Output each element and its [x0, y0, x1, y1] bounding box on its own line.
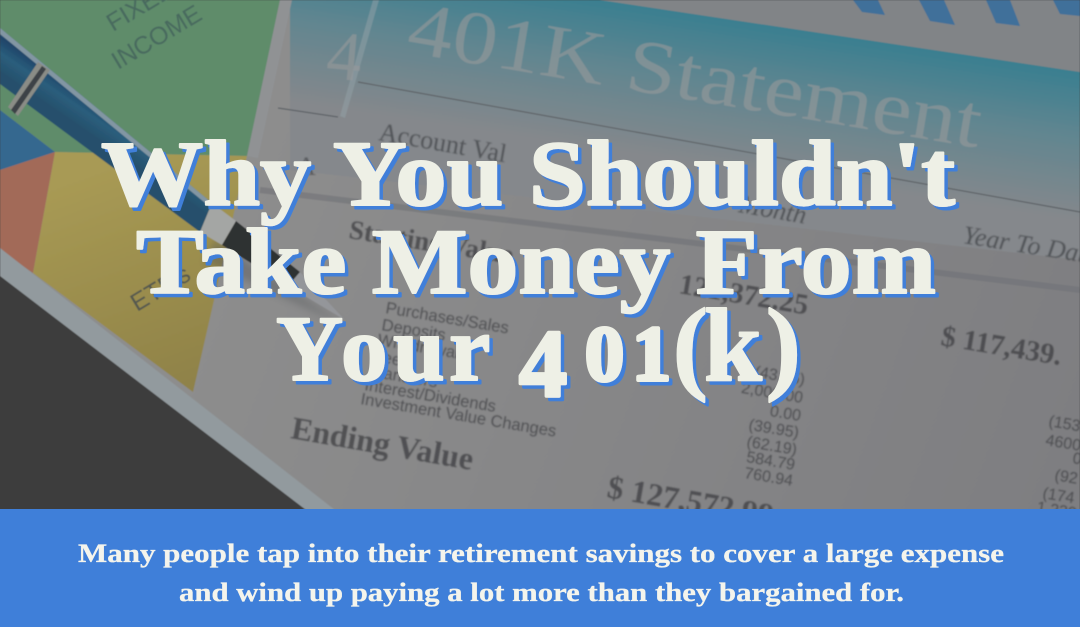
statement body text: (174: [1041, 485, 1076, 507]
statement body text: 0.00: [769, 403, 802, 425]
sheet labels: INCOME: [107, 0, 207, 75]
statement body text: Account Val: [377, 117, 509, 168]
statement body text: 2,000.00: [740, 380, 804, 407]
sheet labels: [102, 0, 207, 317]
statement body text: [289, 117, 1080, 533]
title line 3: Your: [276, 298, 489, 401]
binder edge: [0, 248, 335, 510]
banner background: [0, 509, 1080, 627]
statement body text: (62.19): [745, 434, 798, 459]
statement body text: (92: [1053, 467, 1079, 488]
title line 1: Why You Shouldn't: [101, 123, 955, 226]
statement body text: Interest/Dividends: [363, 375, 497, 416]
sheet labels: ETF's: [126, 260, 195, 317]
teal statement header: [290, 0, 1080, 260]
statement body text: (39.95): [747, 417, 800, 442]
statement rules: [260, 82, 1080, 290]
statement body text: A: [297, 152, 316, 181]
statement body text: Purchases/Sales: [384, 298, 510, 337]
green fixed income sheet: [0, 0, 280, 156]
title line 3: (k): [673, 288, 801, 403]
statement body text: 121,372.25: [677, 268, 811, 321]
dark desk: [0, 276, 306, 510]
title line 2: Take Money From: [136, 211, 936, 314]
statement body text: Withdrawals: [376, 330, 469, 364]
pale page edge: [247, 0, 292, 158]
salmon sheet: [0, 152, 55, 273]
title: [101, 123, 955, 417]
statement header text: [324, 0, 988, 164]
statement body text: $ 117,439.: [939, 320, 1064, 372]
statement body text: (43.25): [753, 364, 806, 389]
statement body text: Deposits: [380, 315, 447, 345]
title line 3: 4: [519, 310, 567, 417]
statement body text: Starting Value: [347, 214, 516, 270]
statement body text: Ending Value: [289, 409, 476, 477]
statement body text: 760.94: [743, 465, 794, 490]
statement body text: $ 127,572.99: [605, 468, 776, 533]
statement body text: Investment Value Changes: [359, 389, 558, 441]
subtitle banner: [0, 509, 1080, 627]
statement body text: Month: [736, 189, 809, 230]
banner line 2: and wind up paying a lot more than they bargained for.: [179, 577, 904, 607]
banner line 1: Many people tap into their retirement savings to cover a large expense: [78, 538, 1004, 568]
statement body text: Fees: [371, 346, 411, 371]
blue sheet: [0, 110, 55, 170]
statement body text: 1,239: [1035, 499, 1078, 523]
statement body text: 584.79: [745, 449, 796, 474]
statement header text: 4: [324, 17, 365, 97]
pen: [0, 28, 345, 325]
title line 3: 01: [585, 310, 671, 397]
yellow sheet: [33, 152, 247, 392]
chart sheet with blue bars: [600, 0, 1080, 72]
statement body text: Transfers: [367, 361, 439, 391]
